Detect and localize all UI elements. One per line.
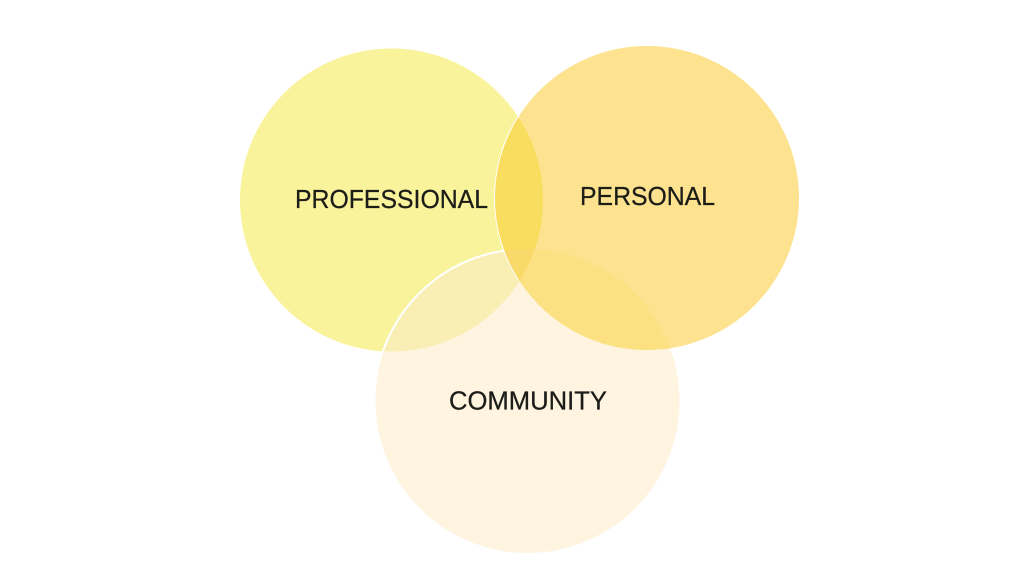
overlap: center xyxy=(504,249,535,280)
overlap: personal and professional xyxy=(495,117,543,280)
venn diagram xyxy=(240,46,799,553)
circle: personal xyxy=(495,46,799,350)
overlap: personal and community xyxy=(504,249,670,350)
label: community: COMMUNITY xyxy=(449,388,607,416)
label: personal: PERSONAL xyxy=(580,183,715,211)
circle: community xyxy=(376,250,680,553)
overlap: professional and community xyxy=(384,252,520,352)
label: professional: PROFESSIONAL xyxy=(295,186,488,214)
circle: professional xyxy=(240,48,543,352)
